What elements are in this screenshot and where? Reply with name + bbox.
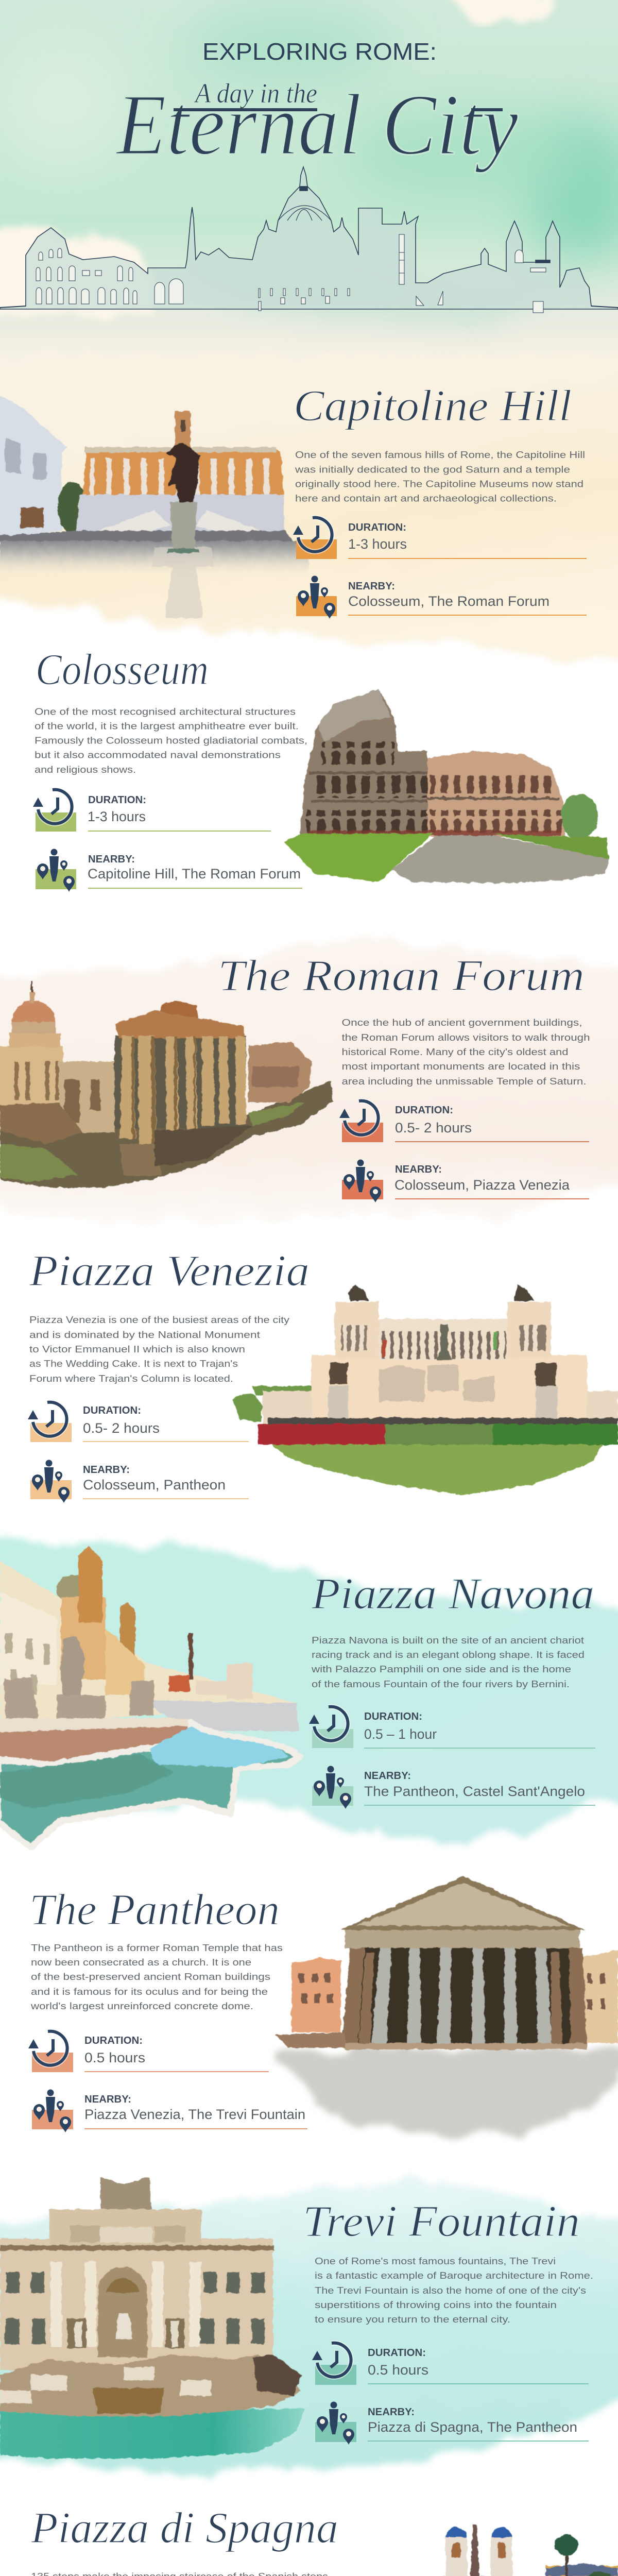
nearby block [32,2090,307,2132]
description: historical Rome. Many of the city's oldest and [342,1046,569,1057]
description: and is dominated by the National Monument [29,1329,260,1340]
duration block [309,1707,595,1749]
nearby block: NEARBY: [83,1464,130,1476]
title: The Pantheon [29,1885,280,1934]
description: superstitions of throwing coins into the fountain [315,2299,557,2310]
nearby block: NEARBY: [88,854,135,865]
duration block: DURATION: [364,1711,422,1722]
description: most important monuments are located in this [342,1061,580,1072]
panel: The Roman Forum [0,940,618,1224]
description: was initially dedicated to the god Saturn and a temple [295,464,570,475]
photo: Vittoriano monument [233,1284,618,1495]
watercolour wash [0,355,618,662]
duration block [28,1402,249,1442]
description: to ensure you return to the eternal city. [315,2314,510,2325]
nearby block: NEARBY: [348,581,395,592]
photo: Colosseum [284,689,609,883]
description: of the best-preserved ancient Roman buildings [31,1971,270,1982]
nearby block [296,576,587,619]
description [311,1635,585,1689]
nearby block: Colosseum, Piazza Venezia [394,1177,570,1193]
description: of the famous Fountain of the four rivers by Bernini. [312,1679,570,1689]
panel: The Pantheon [28,1876,618,2137]
nearby block: NEARBY: [368,2406,415,2418]
duration block: DURATION: [88,794,146,806]
duration block: DURATION: [83,1405,141,1416]
nearby block: Piazza Venezia, The Trevi Fountain [84,2107,305,2122]
nearby block: Colosseum, The Roman Forum [348,594,550,609]
description: Famously the Colosseum hosted gladiatorial combats, [35,735,307,746]
duration block: DURATION: [368,2347,426,2359]
duration block [28,2031,269,2072]
description: and it is famous for its oculus and for being the [31,1986,268,1997]
nearby block [30,1460,249,1503]
description: One of the most recognised architectural structures [35,706,296,717]
description: originally stood here. The Capitoline Museums now stand [295,478,583,489]
heading: Exploring Rome: EXPLORING ROME: [202,38,437,65]
nearby block: Colosseum, Pantheon [83,1477,226,1493]
duration block [312,2343,589,2385]
photo: Roman Forum [0,981,333,1188]
description: here and contain art and archaeological collections. [295,493,557,504]
photo: Trevi Fountain [0,2177,305,2459]
description: Forum where Trajan's Column is located. [29,1373,233,1384]
heading: Eternal City: Eternal City [115,76,518,173]
description [315,2256,593,2325]
description: is a fantastic example of Baroque architecture in Rome. [315,2270,593,2281]
duration block: 0.5 – 1 hour [364,1726,437,1742]
duration block: 0.5- 2 hours [83,1420,160,1436]
description [29,1314,290,1384]
nearby block [36,849,302,892]
panel: Piazza di Spagna [28,2503,618,2576]
description: world's largest unreinforced concrete dome. [30,2001,253,2011]
title: Trevi Fountain [303,2196,580,2246]
description: Piazza Venezia is one of the busiest areas of the city [29,1314,290,1325]
panel: Capitoline Hill [0,355,618,662]
panel: Piazza Venezia [28,1246,618,1503]
watercolour wash [0,940,618,1224]
skyline of Rome [0,167,618,313]
nearby block: NEARBY: [395,1164,442,1175]
nearby block: NEARBY: [364,1770,411,1782]
panel: Trevi Fountain [0,2177,618,2470]
nearby block: Piazza di Spagna, The Pantheon [368,2419,577,2435]
duration block: 0.5- 2 hours [395,1120,472,1136]
description: The Pantheon is a former Roman Temple that has [31,1942,283,1953]
description [35,706,307,775]
description: Once the hub of ancient government buildings, [342,1017,582,1028]
description: One of Rome's most famous fountains, The Trevi [315,2256,556,2266]
duration block [293,518,587,559]
photo: Piazza Navona fountain [0,1546,300,1848]
description: area including the unmissable Temple of Saturn. [342,1076,586,1087]
title: Piazza Navona [311,1569,594,1618]
photo: Capitoline square [0,394,309,618]
description: Piazza Navona is built on the site of an ancient chariot [312,1635,584,1646]
description [342,1017,590,1087]
nearby block [312,1766,595,1809]
description: to Victor Emmanuel II which is also known [29,1344,245,1354]
title: Colosseum [36,645,209,694]
panel: header [0,0,618,371]
panel: Piazza Navona [0,1538,618,1848]
heading: A day in the: A day in the [194,78,317,109]
watercolour wash [0,2181,618,2470]
description [295,449,585,504]
heading rule [174,108,503,111]
nearby block: The Pantheon, Castel Sant'Angelo [364,1784,585,1799]
nearby block: Capitoline Hill, The Roman Forum [88,866,301,882]
description: and religious shows. [35,764,136,775]
description: with Palazzo Pamphili on one side and is the home [311,1664,571,1674]
title: The Roman Forum [218,951,585,1000]
description: One of the seven famous hills of Rome, the Capitoline Hill [295,449,585,460]
description [30,1942,283,2011]
nearby block [315,2402,589,2445]
duration block: DURATION: [348,522,406,533]
description: but it also accommodated naval demonstrations [35,749,281,760]
watercolour wash [0,1538,618,1840]
duration block: 1-3 hours [348,536,407,552]
photo: Spanish Steps [294,2524,618,2576]
duration block: DURATION: [84,2035,143,2046]
description: now been consecrated as a church. It is one [31,1957,251,1968]
nearby block: NEARBY: [84,2094,131,2105]
description: racing track and is an elegant oblong shape. It is faced [312,1649,585,1660]
duration block: DURATION: [395,1105,453,1116]
description: the Roman Forum allows visitors to walk through [342,1032,590,1043]
title: Piazza Venezia [29,1246,310,1295]
duration block: 0.5 hours [84,2050,145,2065]
duration block [339,1101,589,1142]
title: Piazza di Spagna [30,2503,338,2552]
title: Capitoline Hill [294,381,572,430]
description: as The Wedding Cake. It is next to Trajan's [29,1358,238,1369]
photo: Pantheon [276,1876,618,2137]
description: The Trevi Fountain is also the home of one of the city's [315,2285,586,2296]
panel: Colosseum [33,645,609,892]
header watercolour wash [0,0,618,371]
duration block: 0.5 hours [368,2362,428,2378]
duration block: 1-3 hours [88,809,146,824]
description: of the world, it is the largest amphitheatre ever built. [35,720,299,732]
duration block [33,790,271,832]
nearby block [342,1159,589,1202]
